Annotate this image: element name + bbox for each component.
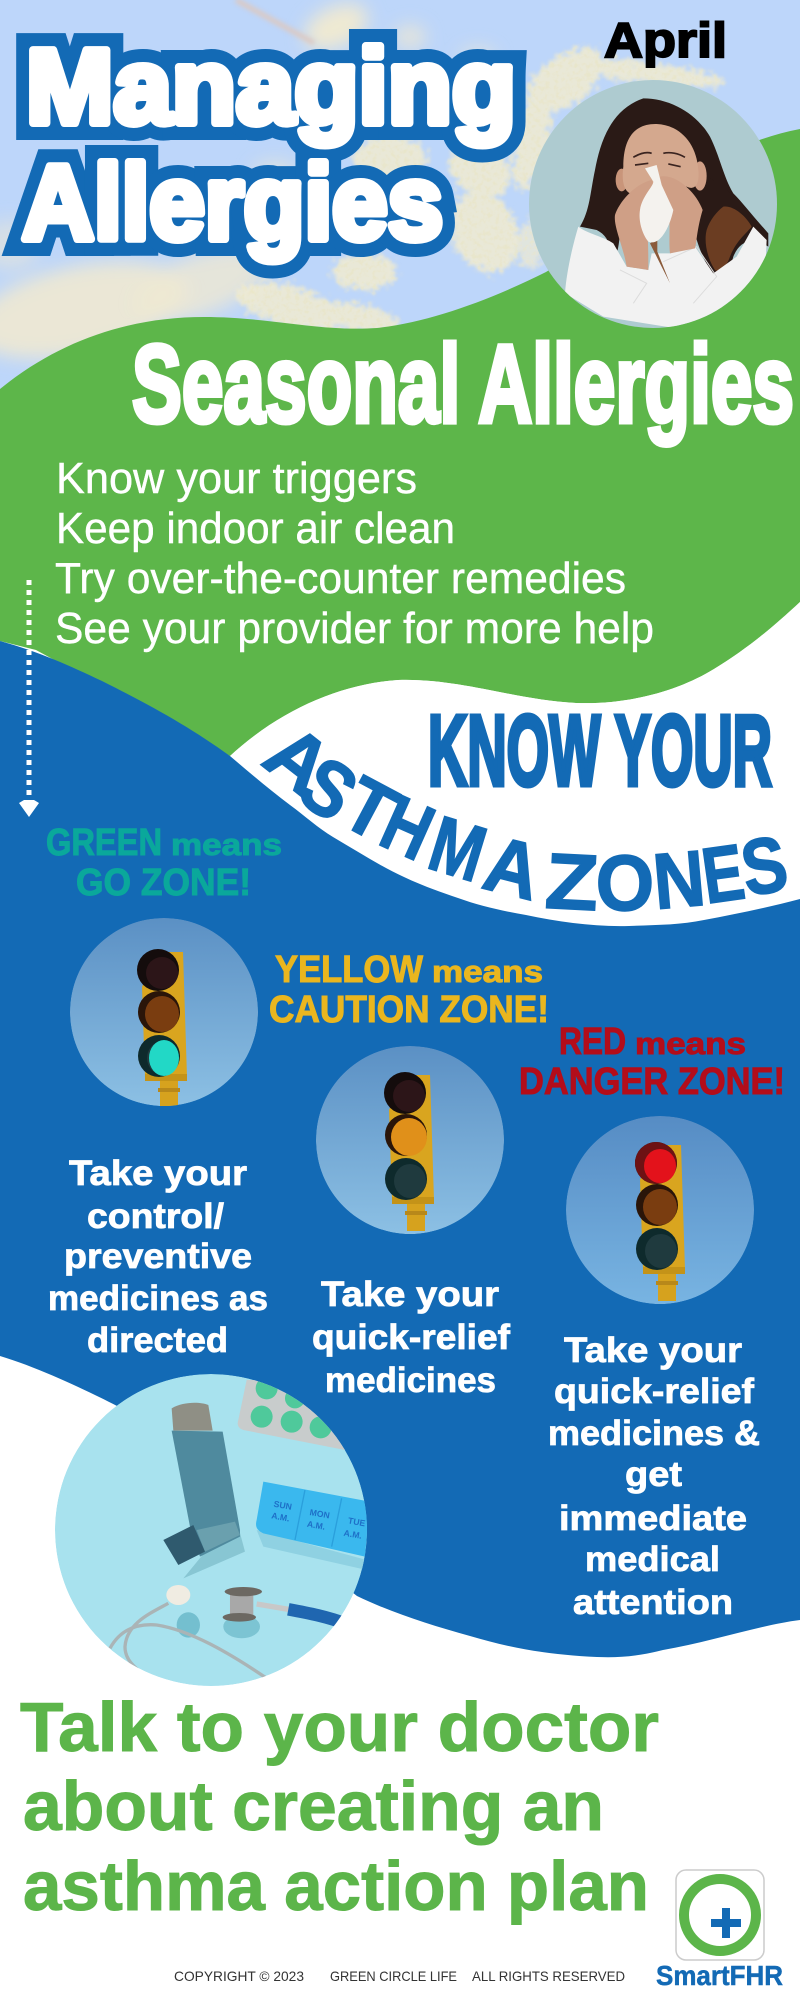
photo: inhaler, pills and stethoscope: A.M.: [271, 1510, 290, 1523]
copyright line: [174, 1968, 625, 1984]
red zone heading: RED: [559, 1021, 626, 1063]
heading: Asthma Zones, curved: M: [419, 799, 496, 899]
yellow zone instructions: [312, 1275, 510, 1400]
logo: SmartFHR: [656, 1870, 783, 1991]
title: Managing Allergies: Allergies: [22, 144, 443, 262]
traffic light: red: [566, 1116, 754, 1304]
call to action: asthma action plan: [23, 1847, 649, 1925]
red zone instructions: quick-relief: [554, 1372, 754, 1411]
photo: inhaler, pills and stethoscope: A.M.: [343, 1528, 363, 1541]
red zone instructions: immediate: [559, 1499, 747, 1538]
green zone instructions: directed: [87, 1321, 228, 1360]
month label: April: [604, 14, 727, 68]
green zone heading: [46, 822, 282, 904]
allergy tips list: Know your triggers: [56, 454, 417, 503]
allergy tips list: See your provider for more help: [55, 604, 654, 653]
green zone heading: GO ZONE!: [76, 862, 251, 904]
copyright line: COPYRIGHT © 2023: [174, 1968, 304, 1984]
blue wave: asthma zones panel: [0, 641, 800, 1657]
green zone instructions: preventive: [64, 1237, 252, 1276]
photo: inhaler, pills and stethoscope: SUN: [273, 1499, 293, 1512]
logo: SmartFHR: SmartFHR: [656, 1960, 783, 1991]
red zone instructions: medical: [585, 1540, 720, 1579]
yellow zone heading: YELLOW: [275, 949, 423, 991]
title: Managing Allergies: Allergies: [22, 144, 443, 262]
photo: inhaler, pills and stethoscope: [55, 1374, 370, 1686]
green zone instructions: control/: [87, 1197, 224, 1236]
green zone instructions: [48, 1154, 268, 1360]
red zone instructions: [548, 1331, 760, 1622]
heading: Asthma Zones, curved: N: [650, 833, 708, 926]
heading: Asthma Zones, curved: E: [697, 828, 750, 921]
red zone instructions: attention: [573, 1583, 733, 1622]
white wave behind asthma heading: [230, 602, 800, 920]
allergy tips list: [55, 454, 654, 653]
green zone heading: GREEN: [46, 822, 162, 864]
green zone instructions: medicines as: [48, 1279, 268, 1318]
green zone instructions: Take your: [69, 1154, 247, 1193]
yellow zone instructions: quick-relief: [312, 1318, 510, 1357]
allergy tips list: Keep indoor air clean: [56, 504, 455, 553]
yellow zone heading: means: [432, 954, 543, 989]
title: Managing Allergies: [22, 28, 516, 262]
allergy tips list: Try over-the-counter remedies: [55, 554, 626, 603]
title: Managing Allergies: Managing: [26, 28, 516, 146]
heading: Asthma Zones, curved: Z: [543, 836, 601, 927]
green zone heading: means: [171, 827, 282, 862]
heading: Asthma Zones, curved: A: [476, 819, 550, 918]
call to action: [20, 1688, 659, 1925]
heading: Asthma Zones, curved: H: [369, 779, 446, 878]
traffic light: green: [70, 918, 258, 1108]
green wave: seasonal allergies panel: [0, 129, 800, 756]
yellow zone heading: CAUTION ZONE!: [269, 989, 549, 1031]
yellow zone instructions: medicines: [325, 1361, 496, 1400]
red zone instructions: get: [625, 1455, 682, 1494]
title: Managing Allergies: Managing: [26, 28, 516, 146]
heading: Asthma Zones, curved: [249, 707, 794, 927]
heading: Asthma Zones, curved: O: [596, 839, 654, 927]
red zone instructions: medicines &: [548, 1414, 760, 1453]
background photo: pussy willow catkins against sky: [0, 0, 800, 460]
red zone heading: [519, 1021, 785, 1103]
copyright line: GREEN CIRCLE LIFE: [330, 1968, 457, 1984]
traffic light: yellow: [316, 1046, 504, 1234]
dotted arrow: [19, 580, 39, 817]
photo: inhaler, pills and stethoscope: A.M.: [306, 1519, 326, 1532]
heading: Asthma Zones, curved: T: [329, 760, 410, 859]
copyright line: ALL RIGHTS RESERVED: [472, 1968, 625, 1984]
red zone heading: means: [635, 1026, 746, 1061]
call to action: about creating an: [23, 1767, 604, 1845]
heading: Asthma Zones, curved: A: [249, 707, 349, 812]
photo: woman sneezing into tissue: [529, 80, 777, 330]
photo: inhaler, pills and stethoscope: MON: [309, 1507, 331, 1520]
yellow zone instructions: Take your: [321, 1275, 499, 1314]
red zone instructions: Take your: [564, 1331, 742, 1370]
heading: Asthma Zones, curved: S: [734, 819, 794, 913]
call to action: Talk to your doctor: [20, 1688, 659, 1766]
photo: inhaler, pills and stethoscope: TUE: [347, 1515, 366, 1528]
heading: Asthma Zones, curved: S: [284, 739, 373, 838]
yellow zone heading: [269, 949, 549, 1031]
